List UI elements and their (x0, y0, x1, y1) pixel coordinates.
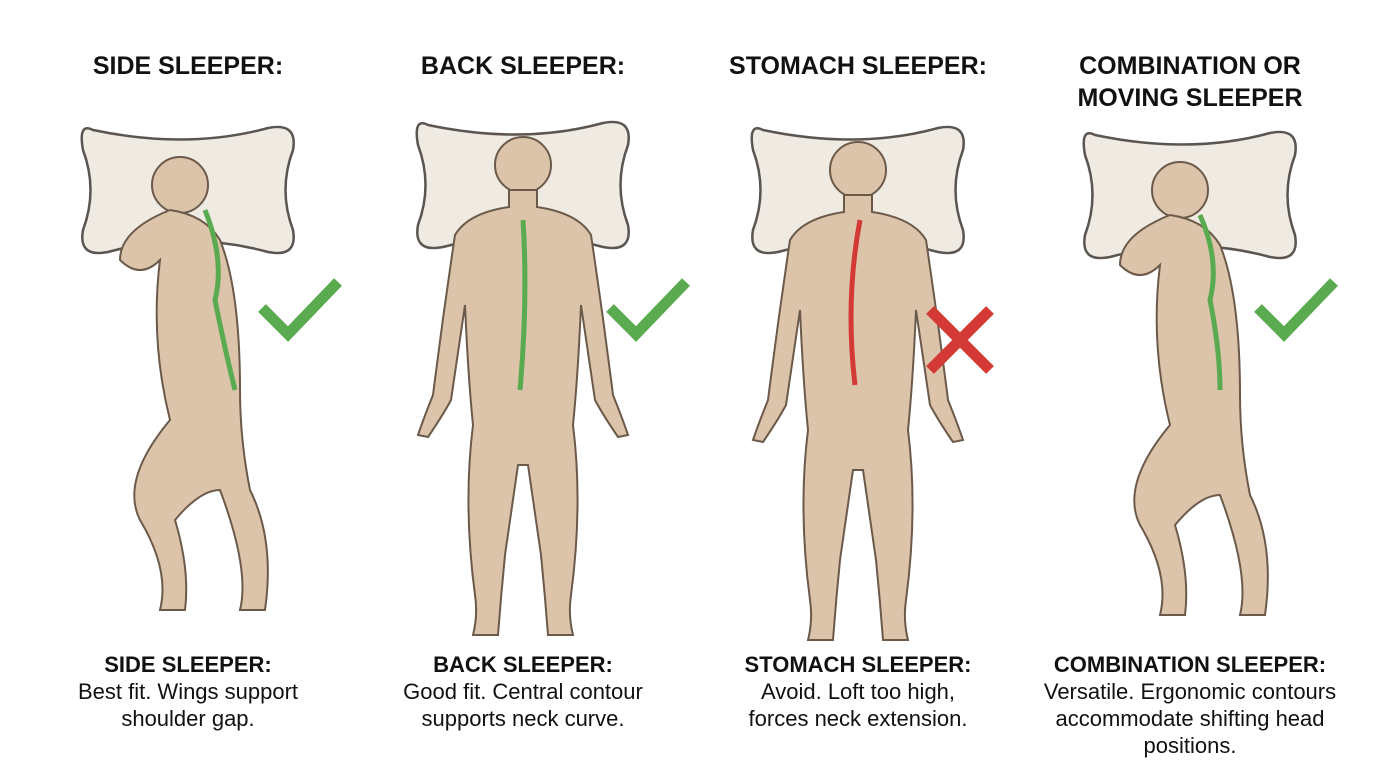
title: combination sleeper: MOVING SLEEPER (1077, 84, 1303, 112)
caption: stomach: Avoid. Loft too high, (761, 679, 955, 704)
icon: check (1258, 282, 1334, 334)
panel: back sleeper figure (417, 122, 686, 635)
title: combination sleeper: COMBINATION OR (1079, 52, 1301, 80)
caption: combination: COMBINATION SLEEPER: (1054, 652, 1326, 677)
caption: side: SIDE SLEEPER: (104, 652, 272, 677)
caption: back: Good fit. Central contour supports neck curve. (403, 679, 643, 731)
title: stomach sleeper: STOMACH SLEEPER: (729, 52, 987, 80)
title: back sleeper: BACK SLEEPER: (421, 52, 625, 80)
icon: cross (930, 310, 990, 370)
caption: stomach: forces neck extension. (749, 706, 967, 731)
icon: check (262, 282, 338, 334)
caption: stomach: STOMACH SLEEPER: (745, 652, 971, 677)
caption: side: Best fit. Wings support shoulder gap. (78, 679, 298, 731)
panel: stomach sleeper figure (752, 127, 990, 640)
caption: stomach (745, 652, 971, 731)
panel: side sleeper figure (82, 127, 338, 610)
caption: side (78, 652, 298, 731)
caption: back: BACK SLEEPER: (433, 652, 613, 677)
icon: check (610, 282, 686, 334)
caption: back (403, 652, 643, 731)
title: side sleeper: SIDE SLEEPER: (93, 52, 283, 80)
panel: combination sleeper figure (1084, 132, 1334, 615)
title: combination sleeper (1077, 52, 1303, 112)
caption: combination: Versatile. Ergonomic contours accommodate shifting head positions. (1044, 679, 1336, 758)
